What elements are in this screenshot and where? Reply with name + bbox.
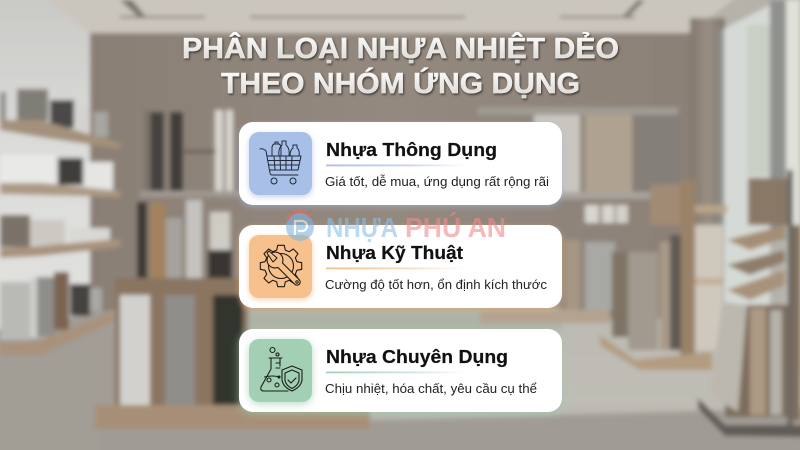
icon: shopping cart with bottles [249, 132, 312, 195]
card: Nhựa Thông Dụng [239, 122, 562, 205]
ceiling [36, 0, 745, 33]
left white wall [0, 0, 90, 345]
strip of floor between cards [248, 308, 562, 330]
far right display stand [698, 170, 800, 437]
description: Giá tốt, dễ mua, ứng dụng rất rộng rãi [325, 174, 549, 189]
heading: Nhựa Chuyên Dụng [326, 346, 508, 367]
heading: Nhựa Kỹ Thuật [326, 242, 463, 263]
icon: gear with wrench [249, 235, 312, 298]
title [182, 32, 619, 100]
title line 2: THEO NHÓM ỨNG DỤNG [221, 68, 580, 100]
centre wood stand with rolls [95, 278, 370, 429]
card: Nhựa Chuyên Dụng [239, 329, 562, 412]
ceiling light slots [120, 0, 645, 18]
watermark logo [286, 211, 506, 243]
watermark wordmark [326, 212, 506, 243]
wordmark: PHÚ AN: PHÚ AN [405, 212, 506, 243]
heading: Nhựa Thông Dụng [326, 139, 497, 160]
back wall panels [478, 107, 685, 323]
watermark icon [286, 211, 314, 241]
description: Cường độ tốt hơn, ổn định kích thước [325, 278, 547, 292]
centre wall rack [137, 110, 240, 280]
floor [0, 318, 800, 450]
right window and curtain [690, 0, 800, 350]
right wood stand [600, 180, 727, 370]
underline [326, 268, 466, 269]
underline [326, 372, 466, 373]
back wall [88, 30, 698, 320]
icon: flask with shield [249, 339, 312, 402]
left wall shelves and products [0, 89, 120, 355]
card: Nhựa Kỹ Thuật [239, 225, 562, 308]
title line 1: PHÂN LOẠI NHỰA NHIỆT DẺO [182, 32, 619, 65]
description: Chịu nhiệt, hóa chất, yêu cầu cụ thể [325, 382, 537, 396]
underline [326, 164, 466, 166]
wordmark: NHỰA: NHỰA [326, 212, 398, 243]
